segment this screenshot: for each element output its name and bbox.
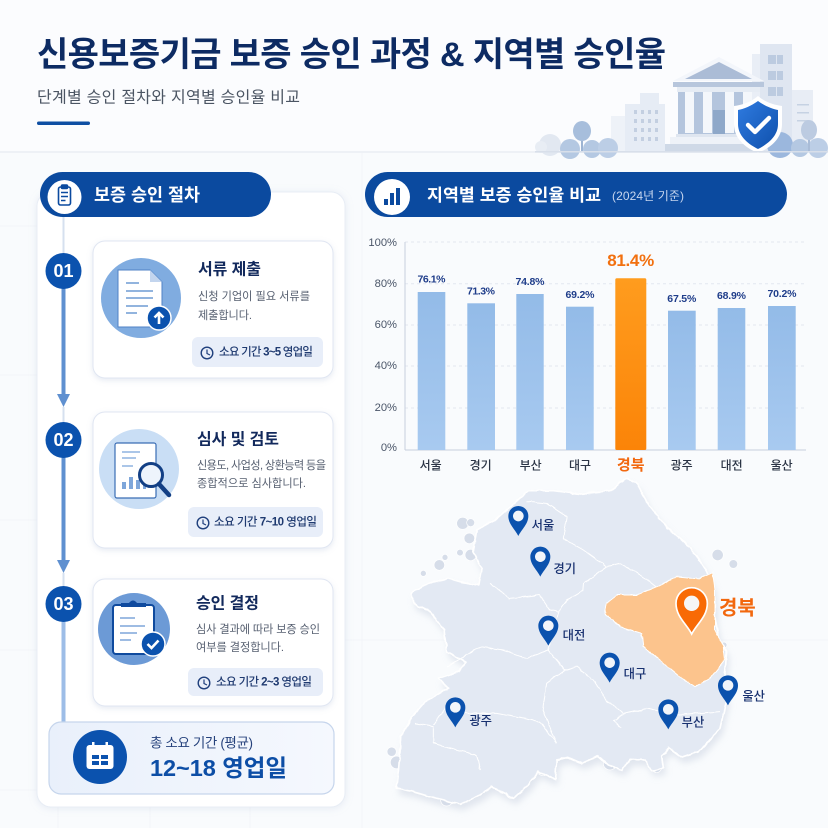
heading pill: regional comparison bbox=[365, 172, 787, 217]
timeline bbox=[57, 217, 70, 723]
total duration box bbox=[49, 722, 334, 794]
trees bbox=[535, 120, 828, 159]
category labels: 광주 bbox=[671, 458, 693, 472]
y axis labels: 0% bbox=[381, 442, 397, 454]
pin: 서울: 서울 bbox=[532, 519, 554, 533]
pin: 대전 bbox=[538, 616, 585, 646]
value labels bbox=[418, 251, 797, 305]
value labels: 71.3% bbox=[467, 286, 496, 298]
heading pill: process bbox=[40, 172, 271, 217]
description: 여부를 결정합니다. bbox=[196, 641, 284, 654]
category labels bbox=[420, 457, 793, 474]
y axis labels: 20% bbox=[375, 402, 397, 414]
pin: 대구: 대구 bbox=[624, 667, 646, 681]
panel: regional approval rate bbox=[365, 172, 806, 810]
description: 심사 결과에 따라 보증 승인 bbox=[196, 623, 320, 636]
y axis labels: 80% bbox=[375, 278, 397, 290]
y axis labels: 100% bbox=[368, 237, 397, 249]
category labels: 부산 bbox=[520, 458, 542, 472]
heading pill: regional comparison: (2024년 기준) bbox=[612, 189, 684, 203]
category labels: 울산 bbox=[771, 458, 793, 472]
card: step 1 document submission: 서류 제출 bbox=[198, 260, 261, 278]
pin: 서울 bbox=[508, 506, 554, 536]
pin: 부산: 부산 bbox=[682, 716, 704, 730]
land shadow bbox=[399, 484, 729, 810]
pin: 광주 bbox=[445, 697, 492, 728]
pin: 경기 bbox=[530, 547, 576, 577]
value labels: 70.2% bbox=[768, 288, 797, 300]
icon: bars bbox=[384, 188, 400, 205]
background buildings bbox=[611, 44, 813, 152]
map of South Korea bbox=[387, 478, 765, 810]
pin: 경북 highlighted: 경북 bbox=[719, 596, 756, 619]
subtitle: 단계별 승인 절차와 지역별 승인율 비교 bbox=[37, 88, 300, 106]
duration pill bbox=[188, 668, 323, 696]
y axis labels bbox=[368, 237, 397, 454]
step badge 02 bbox=[46, 422, 82, 458]
bank building bbox=[665, 57, 764, 152]
y axis labels: 60% bbox=[375, 319, 397, 331]
card: step 2 review: 심사 및 검토 bbox=[197, 430, 279, 448]
pin: 부산 bbox=[658, 699, 704, 730]
value labels: 81.4% bbox=[607, 251, 654, 270]
card: step 3 decision bbox=[93, 579, 333, 706]
total duration box: 12~18 영업일 bbox=[150, 755, 287, 781]
pin: 광주: 광주 bbox=[469, 714, 492, 728]
step badge 03: 03 bbox=[53, 594, 74, 614]
duration pill: 소요 기간 3~5 영업일 bbox=[219, 344, 313, 358]
card: step 1 document submission bbox=[93, 241, 333, 378]
icon: report with magnifier bbox=[99, 429, 179, 509]
card: step 2 review bbox=[93, 412, 333, 548]
grid lines bbox=[405, 242, 806, 408]
header illustration: bank and shield bbox=[535, 44, 828, 159]
title: 신용보증기금 보증 승인 과정 & 지역별 승인율 bbox=[37, 36, 666, 74]
duration pill bbox=[192, 337, 323, 367]
value labels: 74.8% bbox=[516, 276, 545, 288]
land mass and provinces bbox=[396, 478, 727, 804]
pin: 경기: 경기 bbox=[553, 562, 576, 576]
category labels: 경기 bbox=[470, 458, 492, 472]
duration pill: 소요 기간 7~10 영업일 bbox=[214, 514, 317, 528]
panel card bbox=[37, 192, 345, 807]
icon: shield with check bbox=[734, 96, 782, 153]
duration pill bbox=[188, 507, 323, 537]
pin: 대전: 대전 bbox=[563, 629, 585, 643]
bars bbox=[418, 292, 796, 450]
description bbox=[197, 459, 326, 490]
value labels: 69.2% bbox=[566, 289, 595, 301]
title accent rule bbox=[37, 122, 90, 125]
icon: calendar bbox=[73, 730, 127, 784]
y axis labels: 40% bbox=[375, 360, 397, 372]
description: 신용도, 사업성, 상환능력 등을 bbox=[197, 459, 326, 472]
duration pill: 소요 기간 2~3 영업일 bbox=[216, 674, 312, 688]
heading pill: regional comparison: 지역별 보증 승인율 비교 bbox=[427, 185, 601, 205]
panel: approval process bbox=[37, 172, 345, 807]
heading pill: process: 보증 승인 절차 bbox=[94, 185, 200, 205]
pin: 대구 bbox=[600, 653, 646, 683]
category labels: 대전 bbox=[721, 458, 743, 472]
category labels: 서울 bbox=[420, 458, 442, 472]
icon: document upload bbox=[101, 258, 181, 338]
bar chart bbox=[368, 237, 806, 474]
total duration box: 총 소요 기간 (평균) bbox=[150, 736, 253, 750]
step badge 01 bbox=[46, 253, 82, 289]
step badge 02: 02 bbox=[53, 430, 74, 450]
highlighted bar: 경북 bbox=[615, 278, 646, 450]
highlighted region: 경북 bbox=[605, 573, 725, 687]
step badge 01: 01 bbox=[53, 261, 74, 281]
category labels: 대구 bbox=[569, 458, 591, 472]
islands bbox=[387, 517, 738, 806]
description bbox=[196, 623, 320, 654]
pin: 울산: 울산 bbox=[742, 690, 765, 704]
description: 종합적으로 심사합니다. bbox=[197, 477, 306, 490]
description bbox=[198, 290, 310, 322]
value labels: 76.1% bbox=[418, 273, 446, 285]
value labels: 67.5% bbox=[667, 293, 697, 305]
pin: 경북 highlighted bbox=[676, 588, 756, 634]
icon: clipboard with check bbox=[98, 593, 170, 665]
icon: clipboard bbox=[58, 185, 70, 205]
card: step 3 decision: 승인 결정 bbox=[196, 594, 259, 612]
value labels: 68.9% bbox=[717, 290, 747, 302]
category labels: 경북 bbox=[617, 457, 645, 474]
step badge 03 bbox=[46, 586, 82, 622]
description: 제출합니다. bbox=[198, 309, 252, 322]
pin: 울산 bbox=[718, 675, 765, 705]
description: 신청 기업이 필요 서류를 bbox=[198, 290, 310, 303]
